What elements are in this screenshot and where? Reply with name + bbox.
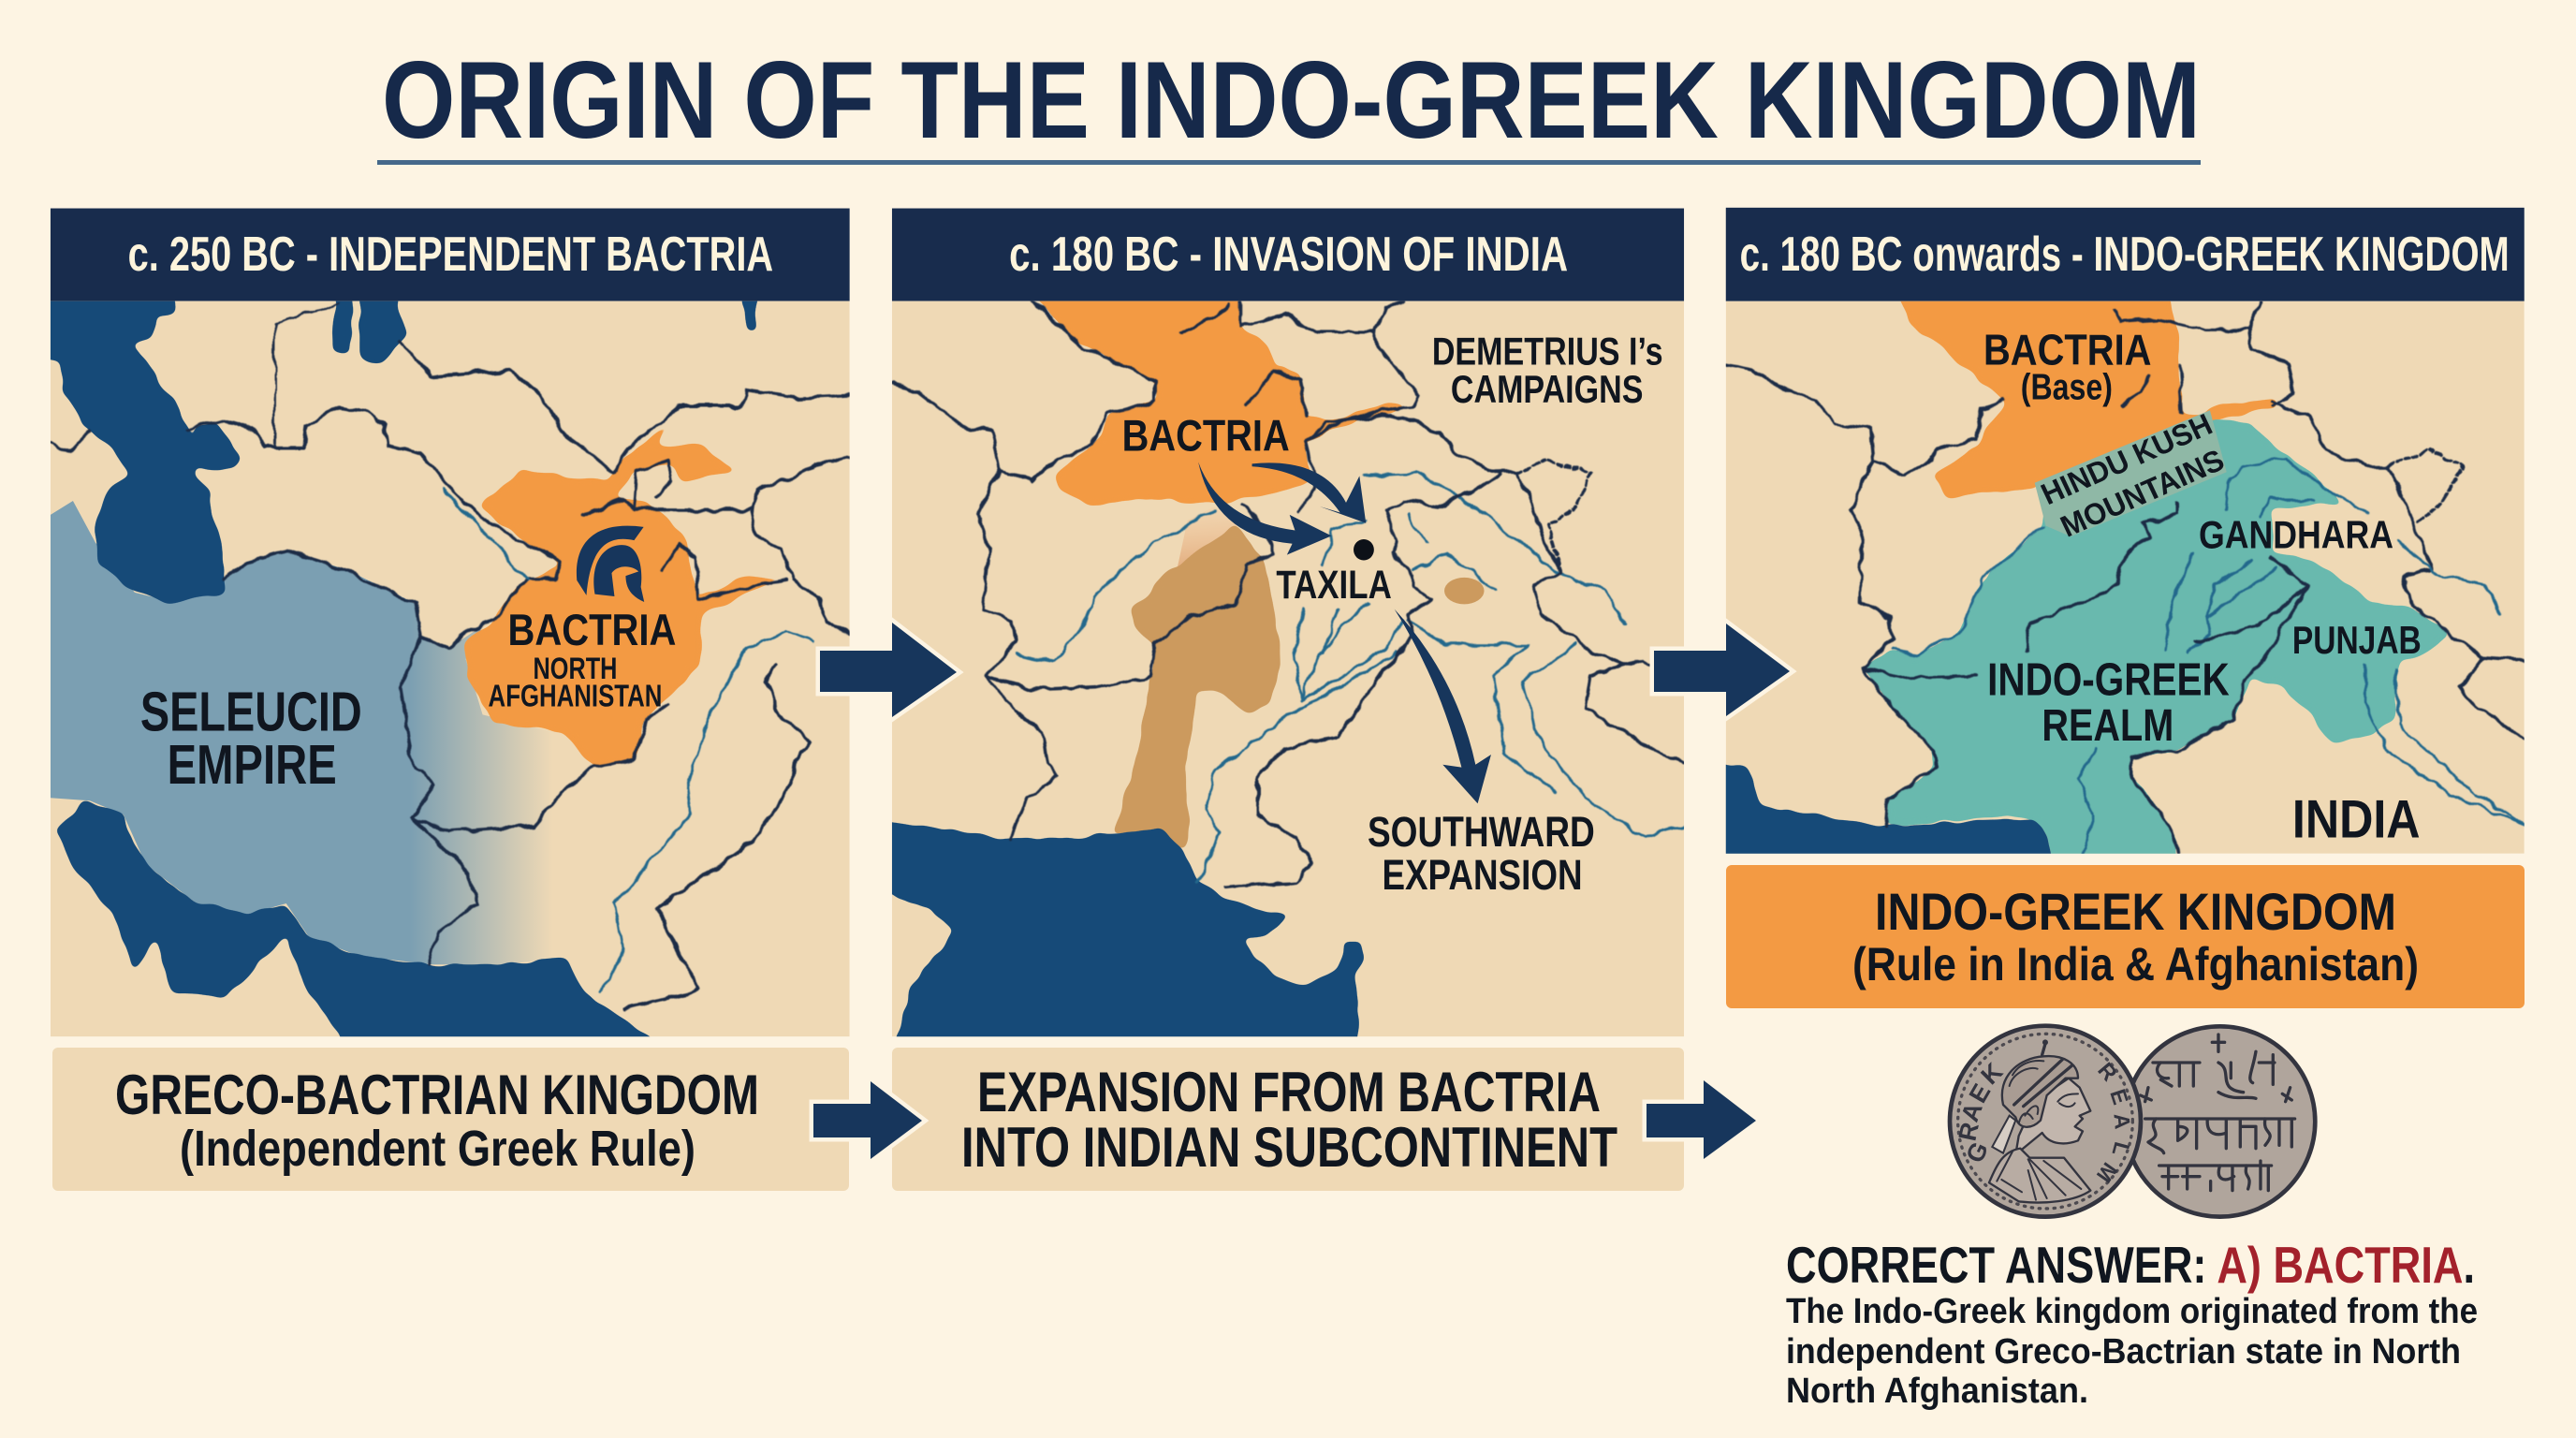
caption: Indo-Greek kingdom [1726, 865, 2525, 1008]
Indo-Greek realm [1862, 418, 2451, 878]
coin legend: GRAEK REALM: A [2109, 1112, 2135, 1130]
coin legend: GRAEK REALM: M [2092, 1158, 2122, 1187]
borders and rivers [892, 301, 1684, 887]
panel 1 header [51, 209, 850, 301]
caption: expansion from Bactria: INTO INDIAN SUBCONTINENT [961, 1116, 1617, 1179]
label: Hindu Kush Mountains: MOUNTAINS [2055, 442, 2229, 544]
caption: Greco-Bactrian kingdom: (Independent Greek Rule) [180, 1121, 695, 1177]
coin legend: GRAEK REALM [1954, 1057, 2135, 1187]
label: Demetrius campaigns: CAMPAIGNS [1451, 367, 1643, 411]
arrow: southward [1395, 609, 1491, 803]
arrow: panel 1 to panel 2 [820, 623, 957, 717]
portrait neck and face [2015, 1078, 2090, 1154]
coin legend: GRAEK REALM: R [2093, 1058, 2122, 1086]
map 1 [28, 279, 850, 1062]
map 2 [871, 279, 1684, 1062]
label: Hindu Kush Mountains: HINDU KUSH [2036, 406, 2217, 511]
conquered territory [1112, 523, 1281, 851]
label: Bactria base: (Base) [2021, 367, 2113, 408]
label: Bactria base [1983, 326, 2151, 408]
Bactria territory [1039, 301, 1402, 506]
label: Demetrius campaigns [1434, 337, 1662, 403]
Seleucid empire territory [51, 501, 594, 964]
label: Seleucid Empire: EMPIRE [168, 733, 337, 796]
panel 3 header [1726, 208, 2525, 301]
label: Taxila: TAXILA [1276, 562, 1392, 607]
Taxila marker [1354, 539, 1374, 560]
coin: obverse with portrait [1950, 1026, 2141, 1217]
label: southward expansion: EXPANSION [1382, 853, 1583, 899]
label: North Afghanistan: AFGHANISTAN [489, 680, 662, 713]
borders [51, 302, 850, 1009]
label: Indo-Greek realm: REALM [2042, 701, 2174, 751]
Bactria base [1890, 276, 2277, 498]
label: southward expansion [1368, 809, 1595, 899]
label: Bactria base: BACTRIA [1983, 326, 2151, 374]
panel 2 header [892, 209, 1684, 301]
panel: independent Bactria map [28, 209, 850, 1062]
label: Seleucid Empire [141, 691, 360, 784]
panel 2 header: c. 180 BC - INVASION OF INDIA [1009, 227, 1568, 281]
caption: Greco-Bactrian kingdom [52, 1048, 849, 1191]
answer explanation: The Indo-Greek kingdom originated from the [1786, 1292, 2478, 1331]
arrow: panel 2 to panel 3 [1654, 624, 1790, 716]
caption: Indo-Greek kingdom: (Rule in India & Afghanistan) [1852, 938, 2419, 990]
answer explanation [1786, 1292, 2478, 1411]
label: Indo-Greek realm: INDO-GREEK [1987, 653, 2230, 705]
drapery [1989, 1149, 2090, 1203]
answer explanation: North Afghanistan. [1786, 1372, 2088, 1411]
coin legend: GRAEK REALM: G [1960, 1137, 1994, 1167]
title underline [377, 160, 2201, 165]
label: North Afghanistan [489, 657, 661, 707]
answer explanation: independent Greco-Bactrian state in North [1786, 1332, 2461, 1372]
Bactria territory [466, 418, 788, 768]
coin legend: GRAEK REALM: E [2105, 1086, 2133, 1108]
caption: Indo-Greek kingdom: INDO-GREEK KINGDOM [1875, 882, 2396, 941]
correct answer heading: CORRECT ANSWER: A) BACTRIA. [1786, 1236, 2475, 1294]
caption: Greco-Bactrian kingdom: GRECO-BACTRIAN KINGDOM [115, 1064, 759, 1126]
label: Indo-Greek realm [1987, 653, 2230, 751]
Aral Sea [331, 301, 758, 363]
panel: invasion of India map [871, 209, 1684, 1062]
arrow: campaign north [1252, 462, 1366, 523]
panel: Indo-Greek kingdom map [1704, 208, 2525, 878]
ribbon [1992, 1116, 2015, 1153]
arrow: campaign west [1198, 462, 1331, 555]
label: southward expansion: SOUTHWARD [1368, 809, 1595, 856]
icon: Greek helmet [577, 526, 644, 602]
portrait hair [2002, 1056, 2078, 1127]
label: Demetrius campaigns: DEMETRIUS I’s [1432, 330, 1663, 374]
label: North Afghanistan: NORTH [534, 652, 617, 685]
arrow: caption 1 to caption 2 [813, 1081, 922, 1159]
small conquered area [1444, 578, 1485, 604]
arrow: caption 2 to coins [1647, 1080, 1756, 1159]
coin legend: GRAEK REALM: R [1954, 1120, 1984, 1143]
label: Bactria: BACTRIA [508, 606, 676, 655]
Hindu Kush band [2035, 410, 2227, 536]
coin legend: GRAEK REALM: L [2107, 1139, 2134, 1159]
Persian Gulf and Arabian Sea [56, 801, 650, 1037]
caption: expansion from Bactria: EXPANSION FROM BACTRIA [977, 1061, 1601, 1123]
sea [1704, 762, 2059, 878]
caption: expansion from Bactria [892, 1048, 1684, 1191]
eye [2057, 1093, 2078, 1107]
Caspian Sea [51, 301, 240, 604]
coin legend: GRAEK REALM: A [1955, 1099, 1988, 1125]
coin: reverse with inscription [2125, 1026, 2315, 1217]
title: ORIGIN OF THE INDO-GREEK KINGDOM [382, 38, 2201, 161]
label: India: INDIA [2292, 789, 2421, 849]
label: Punjab: PUNJAB [2292, 619, 2422, 662]
map 3 [1704, 276, 2525, 878]
label: Bactria: BACTRIA [1122, 411, 1290, 461]
coin legend: GRAEK REALM: K [1975, 1057, 2008, 1090]
Arabian Sea [891, 822, 1364, 1037]
label: Gandhara: GANDHARA [2199, 513, 2393, 557]
panel 1 header: c. 250 BC - INDEPENDENT BACTRIA [128, 227, 773, 281]
conquered territory fade [1178, 511, 1237, 566]
coins [1950, 1026, 2315, 1217]
borders and rivers [1726, 301, 2525, 854]
label: Seleucid Empire: SELEUCID [140, 681, 362, 742]
coin legend: GRAEK REALM: E [1964, 1079, 1996, 1108]
